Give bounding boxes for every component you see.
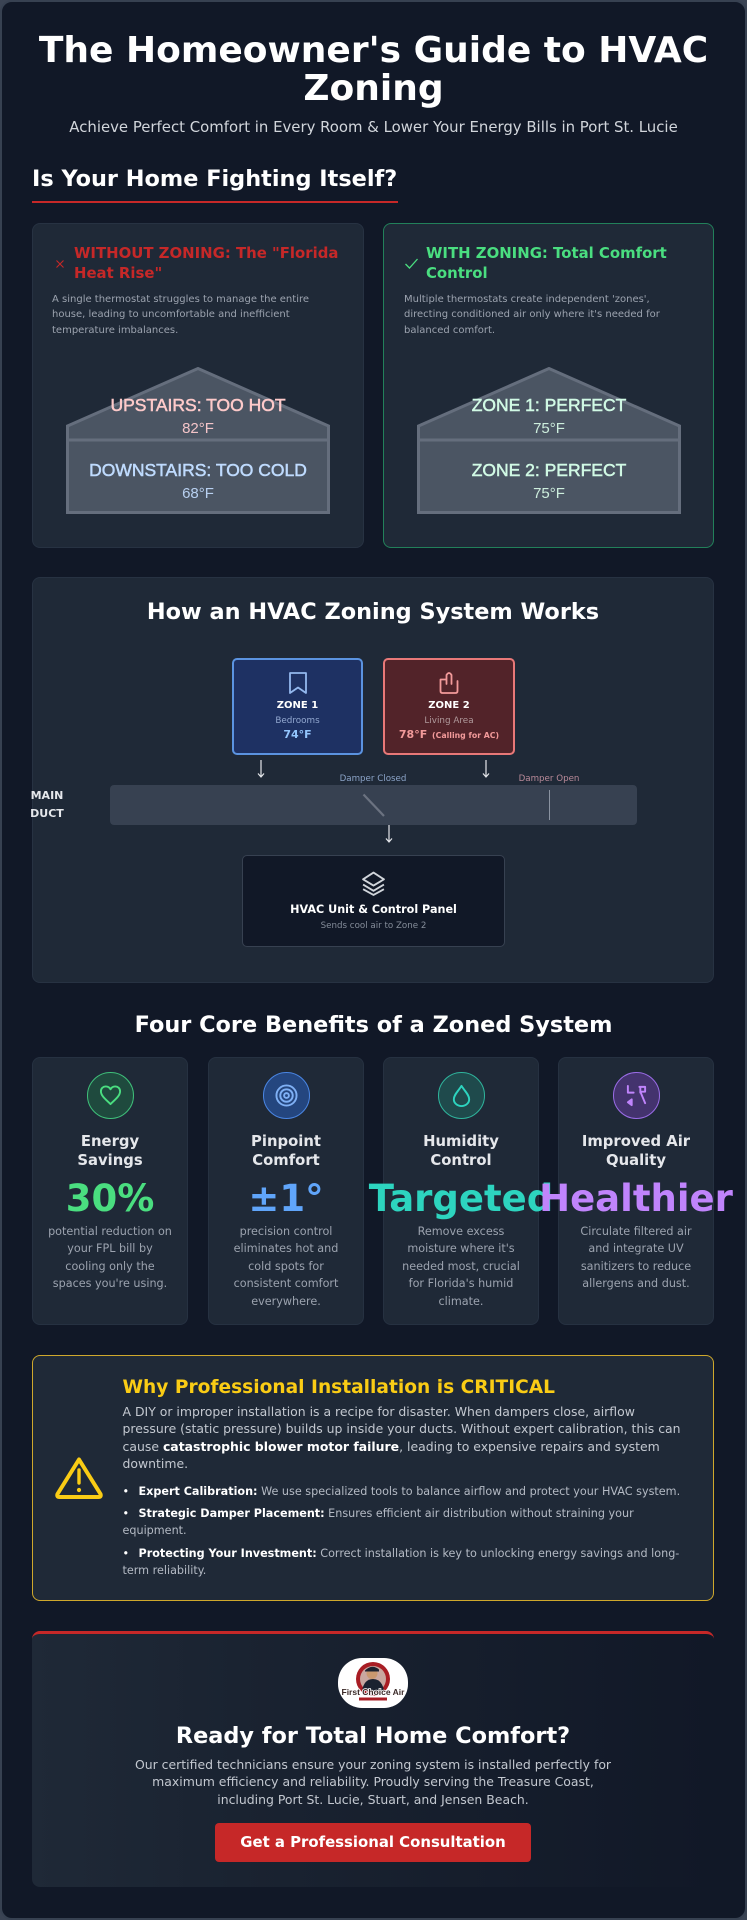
hvac unit label: HVAC Unit & Control Panel [290,903,457,916]
bullet: protecting your investment: Protecting Your Investment: Correct installation is key to unlocking energy savings and long- [138,1547,679,1560]
label: main duct: DUCT [30,807,64,820]
cta body: maximum efficiency and reliability. Proudly serving the Treasure Coast, [152,1774,594,1789]
heading: with zoning: Control [426,264,488,282]
zone 2 temperature: 78°F (Calling for AC) [399,728,499,741]
description: temperature imbalances. [52,325,178,336]
benefit text: needed most, crucial [402,1260,520,1273]
stat: 30%: 30% [66,1177,154,1220]
warning body: downtime. [122,1456,188,1471]
benefit: energy savings [32,1057,188,1325]
benefit text [234,1225,338,1308]
benefit text: cold spots for [248,1260,324,1273]
benefit name: Quality [606,1152,666,1169]
hvac unit and control panel [242,855,505,947]
benefit text: Remove excess [418,1225,504,1238]
stat: targeted: Targeted [369,1177,553,1220]
benefit: pinpoint comfort [208,1057,364,1325]
bullet: expert calibration: • [122,1485,129,1498]
warning body: cause catastrophic blower motor failure, leading to expensive repairs and system [122,1439,660,1454]
icon: red cross [56,260,64,268]
bullet: expert calibration: Expert Calibration: We use specialized tools to balance airflow and protect your HVAC system. [138,1485,680,1498]
main duct [110,785,637,825]
house diagram: perfect zones: 75°F [533,485,565,502]
zone 2 box [383,658,515,755]
bullet: protecting your investment: • [122,1547,129,1560]
benefit name: Humidity [423,1132,499,1150]
icon: heart [87,1072,134,1119]
description: A single thermostat struggles to manage the entire [52,294,309,305]
heading: is your home fighting itself [32,165,398,203]
benefit name: Savings [77,1152,143,1169]
description [52,294,309,336]
title [39,30,708,109]
benefit text: climate. [439,1295,483,1308]
arrow: duct to hvac unit [386,825,392,843]
subtitle: Achieve Perfect Comfort in Every Room & Lower Your Energy Bills in Port St. Lucie [69,118,678,136]
benefit text [48,1225,172,1290]
bullet: strategic damper placement [122,1507,634,1537]
heading: is your home fighting itself: Is Your Home Fighting Itself? [32,166,397,192]
zone 1 label: ZONE 1 [277,700,318,711]
icon: green check [405,258,418,269]
benefit: humidity control [383,1057,539,1325]
bullet: protecting your investment [122,1547,679,1577]
house diagram: too hot and too cold: 68°F [182,485,214,502]
benefit text: for Florida's humid [409,1277,513,1290]
warning body [122,1404,681,1471]
panel: without zoning [32,223,364,548]
heading: ready for total home comfort: Ready for Total Home Comfort? [176,1723,570,1749]
logo: First Choice Air [342,1687,405,1697]
benefit text [402,1225,520,1308]
benefit text: potential reduction on [48,1225,172,1238]
description [404,294,660,336]
zone 1 box [232,658,363,755]
label: main duct: MAIN [31,789,63,802]
heading: how it works: How an HVAC Zoning System Works [147,599,599,625]
zone 1 room: Bedrooms [275,716,320,726]
benefit name [251,1132,321,1169]
house diagram: too hot and too cold [66,367,330,514]
panel: with zoning [383,223,714,548]
bullet: strategic damper placement: Strategic Damper Placement: Ensures efficient air distribution without straining your [138,1507,634,1520]
bullet: strategic damper placement: • [122,1507,129,1520]
benefit text: spaces you're using. [53,1277,167,1290]
heading: with zoning: WITH ZONING: Total Comfort [426,244,667,262]
benefit: improved air quality [558,1057,714,1325]
damper open [549,790,550,820]
title: Zoning [303,68,444,109]
heading: why professional installation: Why Professional Installation is CRITICAL [122,1377,555,1398]
logo [338,1658,408,1708]
icon: layers [362,872,385,896]
heading: without zoning: WITHOUT ZONING: The "Florida [74,244,338,262]
cta body: including Port St. Lucie, Stuart, and Jensen Beach. [217,1792,529,1807]
label: damper closed: Damper Closed [340,774,406,784]
warning body: A DIY or improper installation is a recipe for disaster. When dampers close, airflow [122,1404,635,1419]
damper closed [362,794,385,817]
cta body: Our certified technicians ensure your zoning system is installed perfectly for [135,1757,611,1772]
benefit text: eliminates hot and [234,1242,338,1255]
house diagram: too hot and too cold: UPSTAIRS: TOO HOT [110,395,286,415]
icon: air particles [613,1072,660,1119]
benefit name: Improved Air [582,1132,690,1150]
benefit text: precision control [240,1225,332,1238]
warning body: pressure (static pressure) builds up inside your ducts. Without expert calibration, this can [122,1421,681,1436]
title: The Homeowner's Guide to HVAC [39,30,708,71]
benefit name: Energy [81,1132,139,1150]
bullet: strategic damper placement: equipment. [122,1524,187,1537]
benefit text [580,1225,692,1290]
benefit text: allergens and dust. [582,1277,690,1290]
icon: target [263,1072,310,1119]
heading: without zoning: Heat Rise" [74,264,162,282]
description: balanced comfort. [404,325,495,336]
icon: thermostat hand [440,672,458,694]
bullet: protecting your investment: term reliability. [122,1564,206,1577]
benefit text: your FPL bill by [67,1242,153,1255]
house diagram: perfect zones: 75°F [533,420,565,437]
benefit text: Circulate filtered air [580,1225,692,1238]
house diagram: perfect zones: ZONE 2: PERFECT [472,460,627,480]
zone 2 label: ZONE 2 [428,700,470,711]
house diagram: perfect zones: ZONE 1: PERFECT [472,395,627,415]
benefit text: sanitizers to reduce [581,1260,691,1273]
benefit text: moisture where it's [407,1242,515,1255]
benefit name [77,1132,143,1169]
heading: without zoning [74,244,338,282]
benefit name: Comfort [252,1152,320,1169]
house diagram: too hot and too cold: DOWNSTAIRS: TOO COLD [89,460,307,480]
panel: professional installation warning [32,1355,714,1601]
cta body [135,1757,611,1807]
house diagram: perfect zones [417,367,681,514]
zone 1 temperature: 74°F [283,728,312,741]
panel: call to action [32,1631,714,1887]
button: get a consultation [215,1823,531,1862]
benefit text: everywhere. [251,1295,321,1308]
benefit name: Pinpoint [251,1132,321,1150]
house diagram: too hot and too cold: 82°F [182,420,214,437]
icon: bookmark [289,672,307,694]
label: damper open: Damper Open [519,774,579,784]
stat: healthier: Healthier [539,1177,733,1220]
heading: four core benefits: Four Core Benefits of a Zoned System [135,1012,612,1038]
arrow: zone 2 to duct [482,760,490,778]
icon: warning triangle [55,1457,103,1499]
arrow: zone 1 to duct [258,760,264,778]
stat: plus minus 1 degree: ±1° [248,1177,324,1220]
description: Multiple thermostats create independent 'zones', [404,294,650,305]
benefit text: and integrate UV [588,1242,684,1255]
benefit name: Control [430,1152,492,1169]
benefit name [423,1132,499,1169]
zone 2 room: Living Area [424,716,474,726]
benefit name [582,1132,690,1169]
button: get a consultation: Get a Professional Consultation [240,1833,506,1851]
hvac unit note: Sends cool air to Zone 2 [321,921,426,931]
description: house, leading to uncomfortable and inefficient [52,309,290,320]
description: directing conditioned air only where it's needed for [404,309,660,320]
benefit text: cooling only the [65,1260,155,1273]
heading: with zoning [426,244,667,282]
benefit text: consistent comfort [234,1277,338,1290]
icon: water drop [438,1072,485,1119]
label: main duct [30,789,64,820]
panel: how zoning works [32,577,714,983]
